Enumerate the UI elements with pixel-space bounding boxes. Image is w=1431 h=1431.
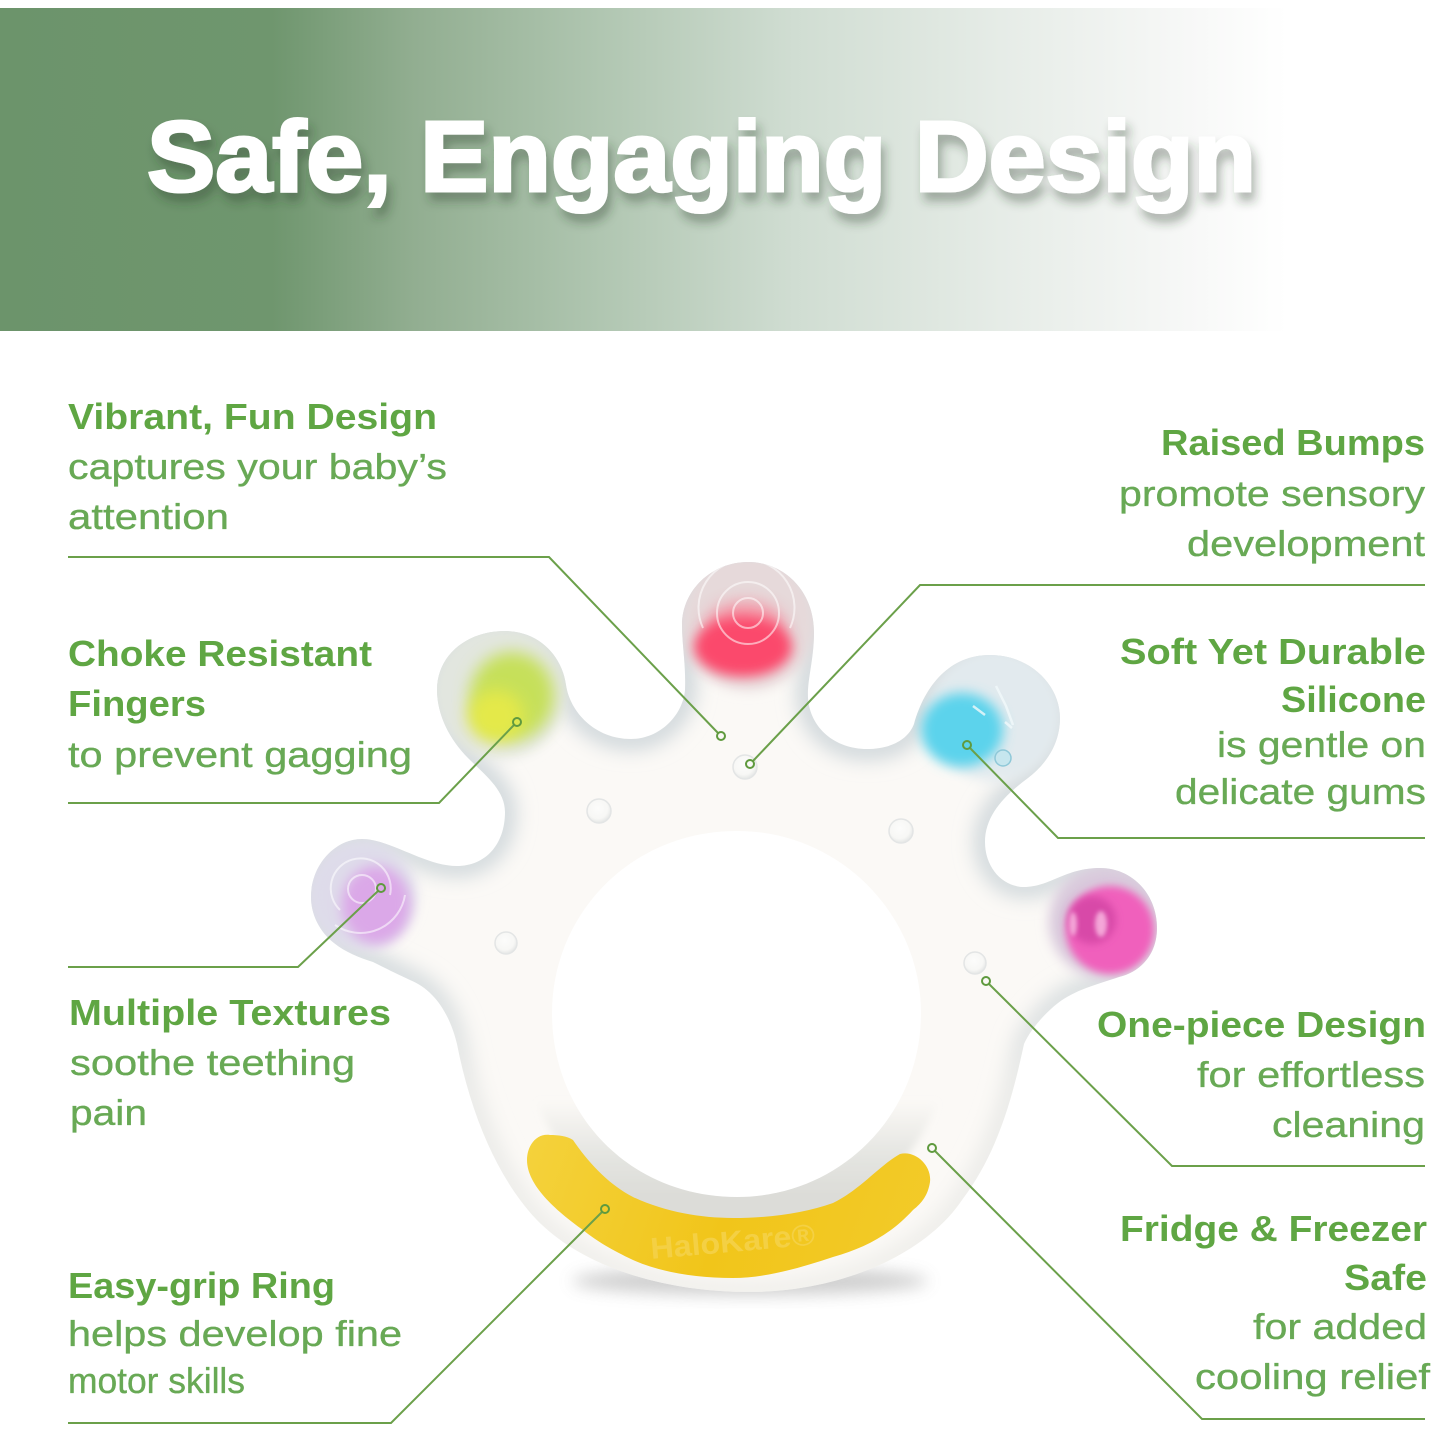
callout: raised bumps [746,422,1425,768]
heading: Fridge & Freezer [1120,1208,1427,1249]
callout: choke resistant fingers [68,633,521,803]
concentric rings: red finger [698,560,794,644]
callout: vibrant fun design: captures your baby’s [68,446,447,487]
callout: fridge and freezer safe [928,1144,1431,1419]
leader line [970,748,1425,838]
callout: one-piece design [982,977,1426,1166]
grey band above grip [552,1120,923,1218]
callout: fridge and freezer safe: for added [1253,1306,1427,1347]
yellow grip band [527,1135,930,1278]
callout: soft yet durable silicone [963,631,1426,838]
centre hole [552,831,921,1197]
leader line [753,585,1425,761]
title: Safe, Engaging Design [147,101,1256,213]
teether body [300,550,1170,1300]
callout: vibrant fun design [68,396,725,740]
body rim shading [311,562,1157,1292]
heading: Soft Yet Durable [1120,631,1426,672]
header banner [0,8,1431,331]
callout: one-piece design: for effortless [1197,1054,1425,1095]
fingertip: blue [921,693,1003,767]
callout: choke resistant fingers: Fingers [68,683,206,724]
callout: easy-grip ring: motor skills [68,1360,245,1401]
callout: multiple textures: pain [70,1092,147,1133]
callout: choke resistant fingers: to prevent gagging [68,734,412,775]
callout: easy-grip ring [68,1205,609,1423]
fingertip: magenta [1066,886,1154,974]
concentric rings: purple finger [331,858,405,933]
small bump: blue finger [995,750,1011,766]
leader line [68,557,718,733]
callout: fridge and freezer safe: Safe [1344,1257,1427,1298]
heading: Easy-grip Ring [68,1265,335,1306]
fingertip: green [468,652,554,742]
callout: raised bumps: promote sensory [1119,473,1425,514]
heading: Choke Resistant [68,633,372,674]
leader line [935,1151,1425,1419]
embossed brand: HaloKare® [649,1219,816,1266]
callout: raised bumps: development [1187,523,1425,564]
product: silicone hand-shaped teether [300,550,1170,1300]
leader line [68,891,378,967]
fingertip: red [694,602,792,677]
heading: Raised Bumps [1161,422,1425,463]
star emboss: blue finger [973,686,1013,728]
callout: soft yet durable silicone: Silicone [1281,679,1426,720]
leader line [68,1212,602,1423]
callout: multiple textures: soothe teething [70,1042,355,1083]
fingertip tints [680,554,816,690]
callout: multiple textures: Multiple Textures [69,992,391,1033]
leader line [989,984,1425,1166]
heading: One-piece Design [1097,1004,1426,1045]
heading: Vibrant, Fun Design [68,396,437,437]
callout: easy-grip ring: helps develop fine [68,1313,402,1354]
callout: soft yet durable silicone: delicate gums [1175,771,1426,812]
ground shadow [572,1267,928,1295]
callout: one-piece design: cleaning [1272,1104,1425,1145]
fingertip: purple [342,866,410,944]
raised bumps [495,755,986,974]
callout: fridge and freezer safe: cooling relief [1195,1356,1431,1397]
callout: multiple textures [68,884,391,1133]
callout: soft yet durable silicone: is gentle on [1217,724,1426,765]
callout: vibrant fun design: attention [68,496,229,537]
leader line [68,725,514,803]
